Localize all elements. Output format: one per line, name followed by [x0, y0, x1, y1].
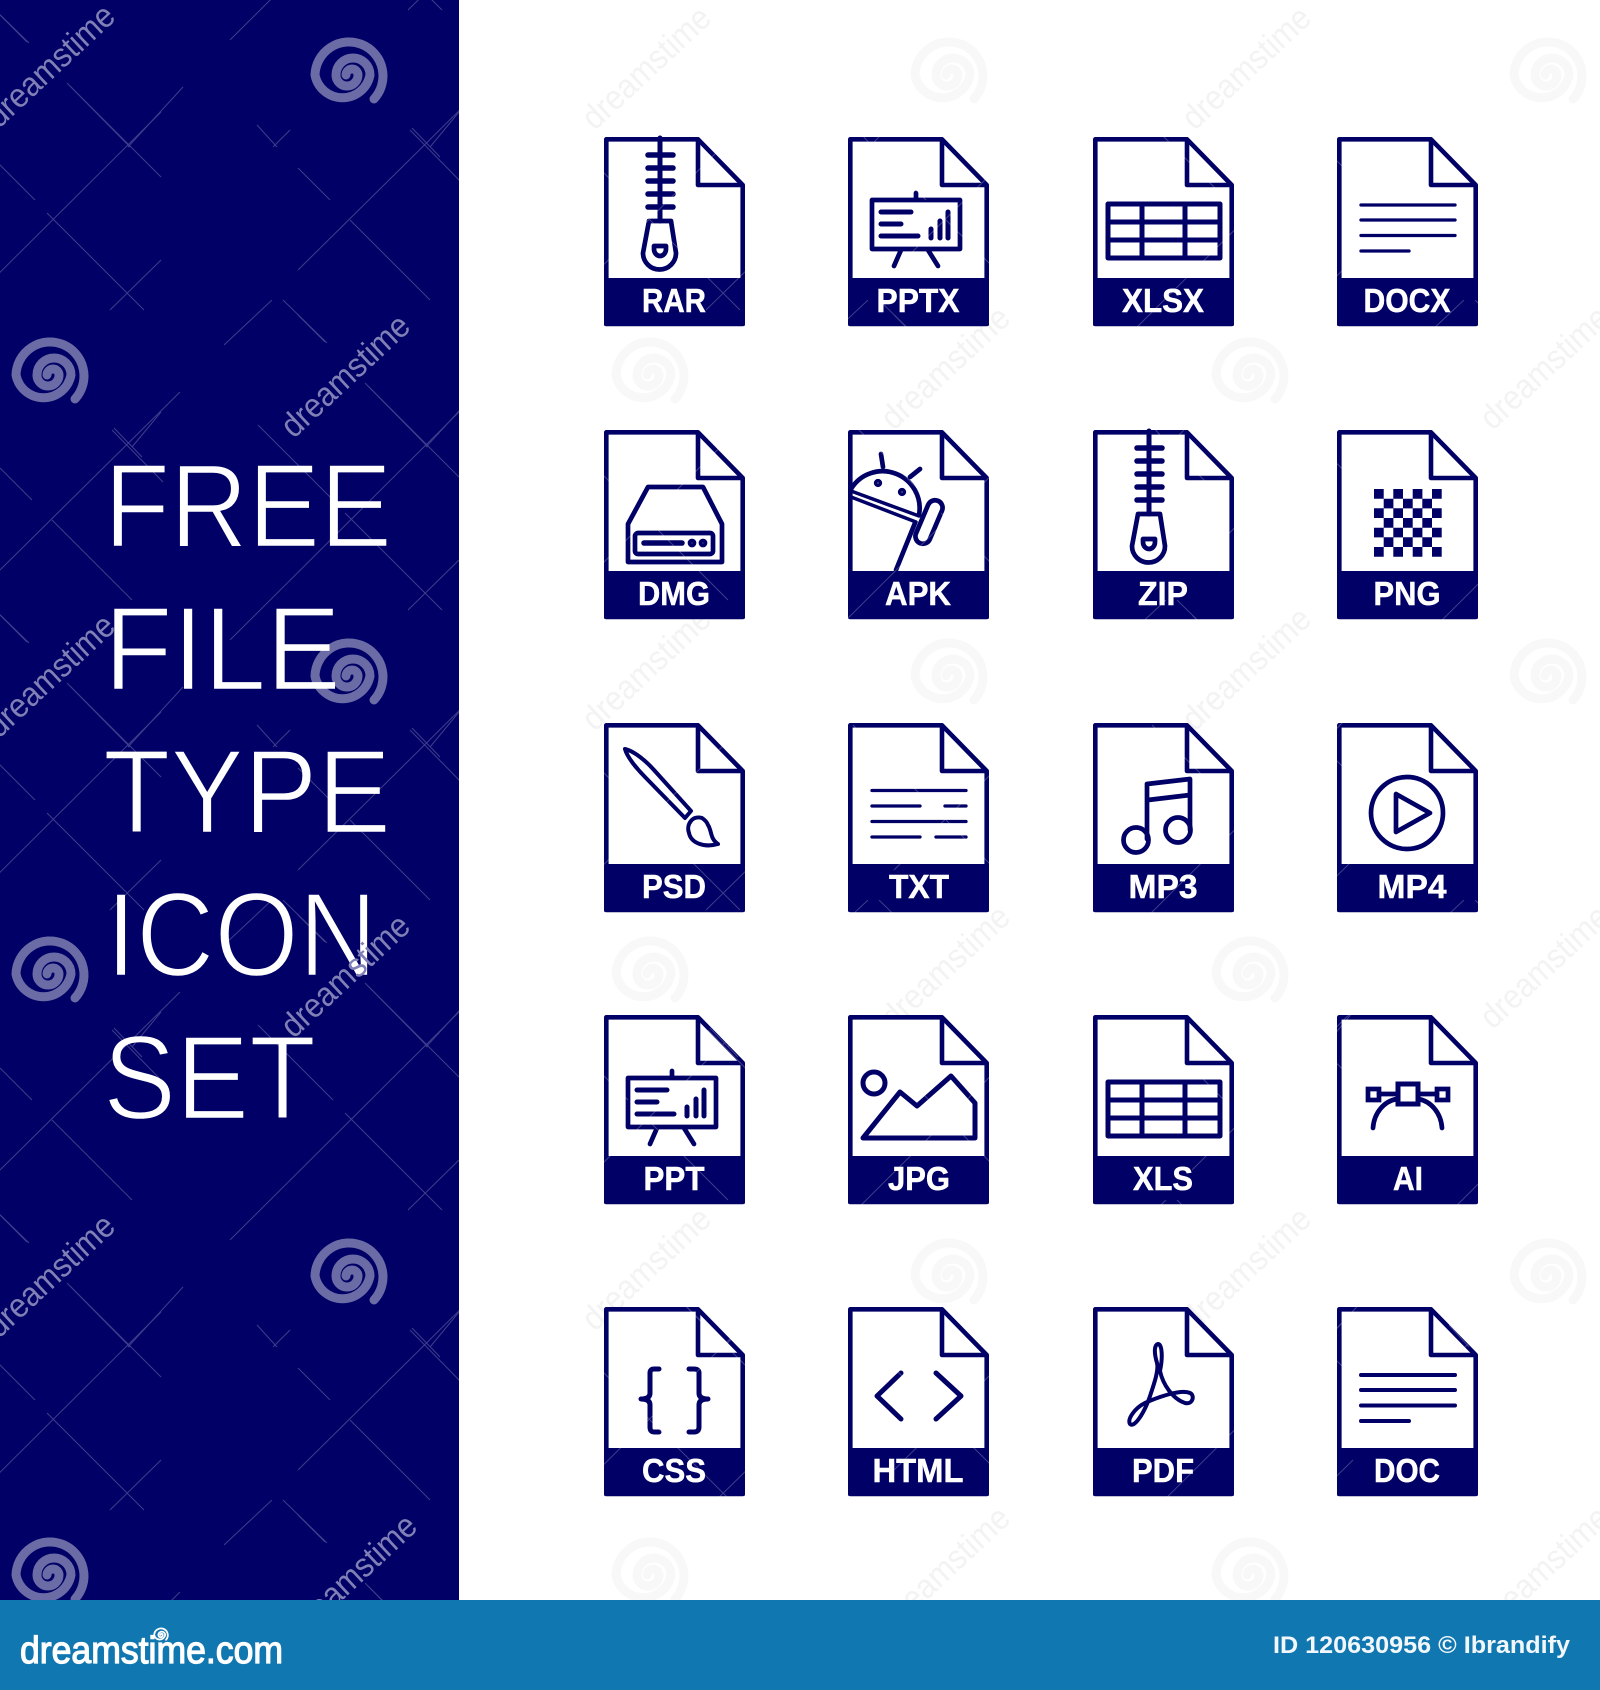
footer credit: ID 120630956 © Ibrandify [1273, 1632, 1571, 1659]
page shape [1093, 725, 1234, 912]
icon: spreadsheet table [1108, 204, 1220, 258]
title: FILE [104, 582, 341, 716]
page shape [1093, 432, 1234, 619]
footer bar [0, 1600, 1600, 1690]
file icon: MP3 [1093, 725, 1234, 912]
label: MP4 [1378, 868, 1447, 905]
label: PSD [642, 868, 706, 905]
icon: android robot [851, 454, 945, 570]
icon: paint brush [625, 749, 718, 845]
page shape [1093, 1017, 1234, 1204]
title: TYPE [103, 725, 391, 859]
page shape [604, 1309, 745, 1496]
icon: bezier vector tool [1368, 1084, 1448, 1128]
faint watermark text on white area: dreamstime [873, 299, 1018, 437]
label: DOC [1374, 1452, 1440, 1489]
label: DOCX [1364, 282, 1450, 319]
title: FREE [104, 439, 392, 573]
panel: navy sidebar [0, 0, 459, 1600]
watermark text on sidebar: dreamstime [273, 907, 418, 1045]
file icon: TXT [848, 725, 989, 912]
page shape [848, 725, 989, 912]
icon: text lines [1361, 205, 1455, 251]
icon: spreadsheet table [1108, 1082, 1220, 1136]
faint watermark spirals on white area [616, 42, 1582, 1599]
icon: zipper [1132, 431, 1165, 562]
page shape [1093, 1309, 1234, 1496]
file icon: PDF [1093, 1309, 1234, 1496]
icon: landscape image [863, 1072, 975, 1138]
page shape [1093, 139, 1234, 326]
icon: music notes [1124, 779, 1190, 852]
page shape [604, 432, 745, 619]
file icon: MP4 [1337, 725, 1478, 912]
faint watermark text on white area: dreamstime [574, 600, 719, 738]
label: PPT [644, 1160, 704, 1197]
watermark spirals on sidebar [16, 42, 383, 1599]
label: RAR [642, 282, 706, 319]
page shape [848, 432, 989, 619]
label: HTML [872, 1452, 964, 1489]
label: APK [885, 575, 951, 612]
label: TXT [889, 868, 949, 905]
watermark text on sidebar: dreamstime [280, 1507, 425, 1645]
icon: play button [1371, 777, 1443, 849]
title: ICON [106, 868, 377, 1002]
title [103, 439, 392, 1145]
faint watermark text on white area [574, 0, 1600, 1637]
page shape [1337, 432, 1478, 619]
file icon: CSS [604, 1309, 745, 1496]
watermark text on sidebar [0, 0, 425, 1645]
file icon: ZIP [1093, 431, 1234, 619]
label: AI [1393, 1160, 1423, 1197]
file icon: PNG [1337, 432, 1478, 619]
icon: disk drive [628, 487, 722, 562]
file icon: RAR [604, 138, 745, 326]
file icon: JPG [848, 1017, 989, 1204]
label: PPTX [876, 282, 960, 319]
page shape [604, 725, 745, 912]
label: PNG [1374, 575, 1440, 612]
icon: curly braces [641, 1369, 708, 1432]
icon: angle brackets [877, 1373, 961, 1419]
file icon: HTML [848, 1309, 989, 1496]
faint watermark text on white area: dreamstime [1174, 1200, 1319, 1338]
footer logo: dreamstime.com [20, 1630, 283, 1672]
label: MP3 [1128, 868, 1198, 905]
faint watermark text on white area: dreamstime [1174, 600, 1319, 738]
file icon: XLSX [1093, 139, 1234, 326]
label: DMG [638, 575, 710, 612]
page shape [604, 139, 745, 326]
page shape [848, 1309, 989, 1496]
page shape [1337, 725, 1478, 912]
label: XLSX [1122, 282, 1204, 319]
file icon: PSD [604, 725, 745, 912]
icon: text lines [1361, 1375, 1455, 1421]
page shape [848, 1017, 989, 1204]
label: PDF [1132, 1452, 1194, 1489]
page shape [1337, 139, 1478, 326]
icon: transparency checkerboard [1374, 489, 1442, 557]
faint watermark text on white area: dreamstime [574, 1200, 719, 1338]
file icon: APK [848, 432, 989, 619]
label: JPG [888, 1160, 950, 1197]
page shape [1337, 1017, 1478, 1204]
page shape [1337, 1309, 1478, 1496]
icon: zipper [643, 138, 676, 270]
file icon: PPTX [848, 139, 989, 326]
faint watermark text on white area: dreamstime [873, 898, 1018, 1036]
file icon: AI [1337, 1017, 1478, 1204]
file icon: XLS [1093, 1017, 1234, 1204]
label: XLS [1133, 1160, 1193, 1197]
page shape [604, 1017, 745, 1204]
label: ZIP [1138, 575, 1188, 612]
label: CSS [642, 1452, 706, 1489]
file icon: DOCX [1337, 139, 1478, 326]
faint watermark text on white area: dreamstime [873, 1499, 1018, 1637]
file icon: DOC [1337, 1309, 1478, 1496]
icon: acrobat mark [1129, 1344, 1193, 1425]
icon: presentation board [872, 193, 960, 266]
watermark text on sidebar: dreamstime [273, 307, 418, 445]
page shape [848, 139, 989, 326]
icon: presentation board [628, 1071, 716, 1144]
file icon: DMG [604, 432, 745, 619]
icon: text lines [872, 790, 966, 837]
file icon: PPT [604, 1017, 745, 1204]
title: SET [103, 1011, 316, 1145]
